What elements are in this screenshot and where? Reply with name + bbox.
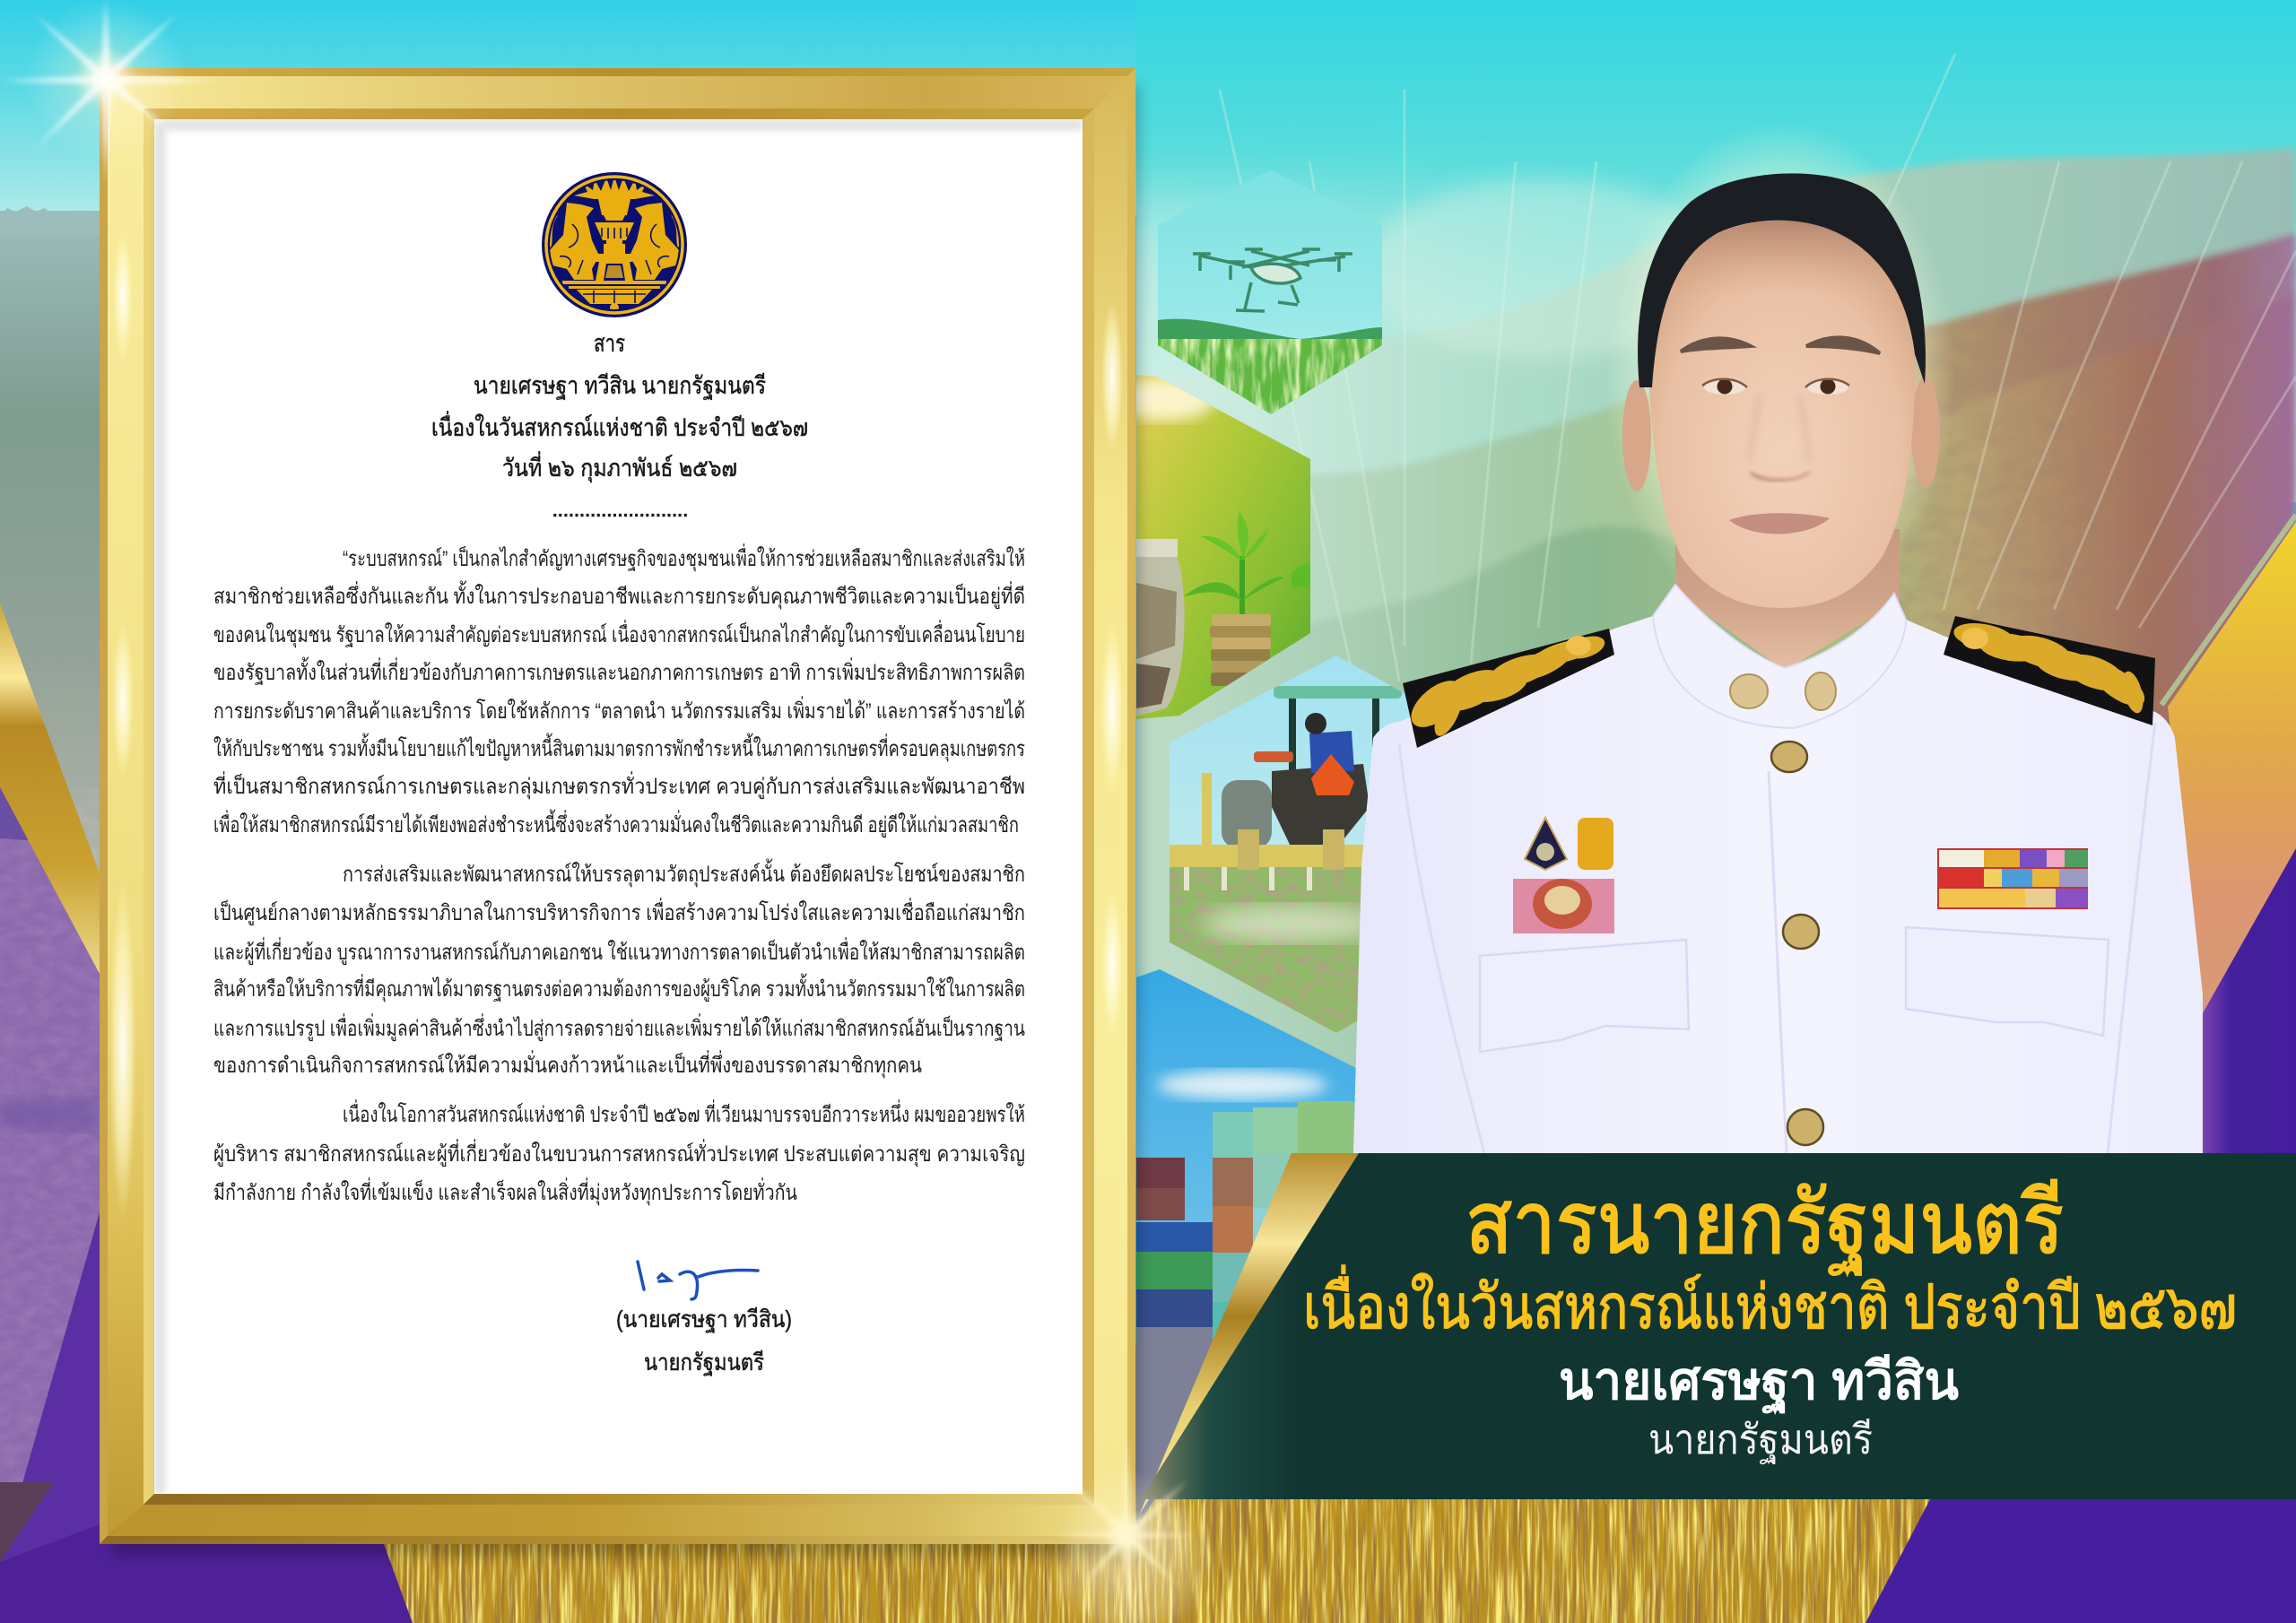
letter paragraph 2: และการแปรรูป เพื่อเพิ่มมูลค่าสินค้าซึ่งนำไปสู่การลดรายจ่ายและเพิ่มรายได้ให้แก่สมาชิกสหกรณ์อันเป็นรากฐาน — [213, 1013, 1025, 1042]
letter header — [431, 330, 808, 522]
right epaulette — [1944, 616, 2155, 725]
collar pins — [1730, 673, 1836, 710]
sleeve and placket seams — [1399, 723, 2155, 1153]
portrait: prime minister in white uniform — [1353, 121, 2203, 1153]
icon: glass jar of coins — [1136, 539, 1185, 716]
nose — [1749, 395, 1812, 482]
mouth — [1729, 513, 1830, 534]
photo hexagon: tractor in field — [1170, 655, 1410, 1033]
header: date: วันที่ ๒๖ กุมภาพันธ์ ๒๕๖๗ — [502, 451, 737, 483]
face — [1648, 221, 1916, 608]
letter paragraph 1: ให้กับประชาชน รวมทั้งมีนโยบายแก้ไขปัญหาหนี้สินตามมาตรการพักชำระหนี้ในภาคการเกษตรที่ครอบคลุมเกษตรกร — [213, 733, 1025, 762]
icon: coin stack with seedling — [1184, 512, 1310, 686]
letter paragraph 1: การยกระดับราคาสินค้าและบริการ โดยใช้หลักการ “ตลาดนำ นวัตกรรมเสริม เพิ่มรายได้” และการสร้างรายได้ — [213, 696, 1025, 724]
title panel — [1141, 1153, 2296, 1499]
letter paragraph 3: เนื่องในโอกาสวันสหกรณ์แห่งชาติ ประจำปี ๒๕๖๗ ที่เวียนมาบรรจบอีกวาระหนึ่ง ผมขออวยพรให้ — [343, 1099, 1025, 1127]
hair — [1638, 173, 1926, 387]
photo hexagon: plants and coins — [1136, 375, 1310, 719]
signatory title: นายกรัฐมนตรี — [644, 1349, 764, 1376]
seal: flames — [574, 180, 655, 199]
neck — [1675, 529, 1900, 671]
letter paragraph 2: ของการดำเนินกิจการสหกรณ์ให้มีความมั่นคงก้าวหน้าและเป็นที่พึ่งของบรรดาสมาชิกทุกคน — [213, 1050, 922, 1079]
title: main heading: สารนายกรัฐมนตรี — [1465, 1176, 2064, 1276]
letter paper — [154, 119, 1083, 1494]
left epaulette — [1403, 629, 1614, 748]
letter paragraph 2: สินค้าหรือให้บริการที่มีคุณภาพได้มาตรฐานตรงต่อความต้องการของผู้บริโภค รวมทั้งนำนวัตกรรมมาใช้ในการผลิต — [213, 973, 1025, 1002]
ears — [1622, 377, 1940, 491]
uniform — [1353, 585, 2203, 1153]
letter paragraph 3: ผู้บริหาร สมาชิกสหกรณ์และผู้ที่เกี่ยวข้องในขบวนการสหกรณ์ทั่วประเทศ ประสบแต่ความสุข ความเจริญ — [213, 1139, 1025, 1167]
seal: urn — [595, 199, 634, 254]
gold ribbon accent — [1139, 1153, 1359, 1515]
gold picture frame — [100, 68, 1139, 1556]
letter paragraph 2: เป็นศูนย์กลางตามหลักธรรมาภิบาลในการบริหารกิจการ เพื่อสร้างความโปร่งใสและความเชื่อถือแก่สมาชิก — [213, 898, 1025, 926]
bottom right purple shape — [1866, 1499, 2296, 1623]
right rays — [1220, 54, 2296, 681]
seal: table — [596, 254, 633, 281]
letter paragraph 1: ที่เป็นสมาชิกสหกรณ์การเกษตรและกลุ่มเกษตรกรทั่วประเทศ ควบคู่กับการส่งเสริมและพัฒนาอาชีพ — [213, 771, 1025, 800]
signatory name: (นายเศรษฐา ทวีสิน) — [616, 1306, 792, 1333]
lens flare: top left — [0, 0, 220, 184]
buttons — [1771, 742, 1823, 1145]
header: word "message": สาร — [594, 330, 625, 357]
letter paragraph 1: สมาชิกช่วยเหลือซึ่งกันและกัน ทั้งในการประกอบอาชีพและการยกระดับคุณภาพชีวิตและความเป็นอยู่ที่ดี — [213, 580, 1025, 610]
pockets — [1480, 927, 2109, 1052]
lens flare: bottom right — [1054, 1435, 1197, 1623]
letter paragraph 3 — [213, 1099, 1025, 1206]
name: นายเศรษฐา ทวีสิน — [1559, 1352, 1959, 1415]
icon: drone — [1193, 249, 1352, 311]
left lavender field and gold diagonal band — [0, 603, 100, 1623]
letter paragraph 2 — [213, 858, 1025, 1079]
icon: government seal — [542, 172, 687, 317]
signatory block — [616, 1306, 792, 1376]
seal: lions — [549, 203, 599, 280]
bottom left purple shape — [0, 1524, 413, 1623]
header: dotted divider: ......................... — [552, 495, 689, 522]
letter paragraph 2: และผู้ที่เกี่ยวข้อง บูรณาการงานสหกรณ์กับภาคเอกชน ใช้แนวทางการตลาดเป็นตัวนำเพื่อให้สมาชิกสามารถผลิต — [213, 937, 1025, 966]
icon: tractor — [1222, 686, 1402, 848]
left medals — [1513, 818, 1614, 933]
signature — [638, 1262, 758, 1299]
eyebrows — [1681, 337, 1880, 353]
letter paragraph 1: เพื่อให้สมาชิกสหกรณ์มีรายได้เพียงพอส่งชำระหนี้ซึ่งจะสร้างความมั่นคงในชีวิตและความกินดี อยู่ดีให้แก่มวลสมาชิก — [213, 809, 1019, 838]
right yellow and purple shapes — [2161, 515, 2296, 1157]
letter paragraph 1: ของรัฐบาลทั้งในส่วนที่เกี่ยวข้องกับภาคการเกษตรและนอกภาคการเกษตร อาทิ การเพิ่มประสิทธิภาพการผลิต — [213, 656, 1025, 685]
bottom rice field — [341, 1488, 1955, 1623]
letter paragraph 1: ของคนในชุมชน รัฐบาลให้ความสำคัญต่อระบบสหกรณ์ เนื่องจากสหกรณ์เป็นกลไกสำคัญในการขับเคลื่อนนโยบาย — [213, 620, 1025, 648]
header: author: นายเศรษฐา ทวีสิน นายกรัฐมนตรี — [474, 372, 766, 400]
position: นายกรัฐมนตรี — [1648, 1416, 1873, 1464]
letter paragraph 1: “ระบบสหกรณ์” เป็นกลไกสำคัญทางเศรษฐกิจของชุมชนเพื่อให้การช่วยเหลือสมาชิกและส่งเสริมให้ — [343, 543, 1025, 572]
eyes — [1702, 378, 1849, 395]
right medal ribbons — [1937, 848, 2088, 909]
header: occasion: เนื่องในวันสหกรณ์แห่งชาติ ประจำปี ๒๕๖๗ — [431, 411, 808, 441]
collar — [1653, 585, 1906, 728]
letter paragraph 1 — [213, 543, 1025, 838]
photo hexagon: shipping containers — [1136, 969, 1363, 1524]
letter paragraph 2: การส่งเสริมและพัฒนาสหกรณ์ให้บรรลุตามวัตถุประสงค์นั้น ต้องยึดผลประโยชน์ของสมาชิก — [343, 858, 1025, 888]
letter paragraph 3: มีกำลังกาย กำลังใจที่เข้มแข็ง และสำเร็จผลในสิ่งที่มุ่งหวังทุกประการโดยทั่วกัน — [213, 1177, 797, 1206]
photo hexagon: drone over field — [1158, 170, 1382, 421]
